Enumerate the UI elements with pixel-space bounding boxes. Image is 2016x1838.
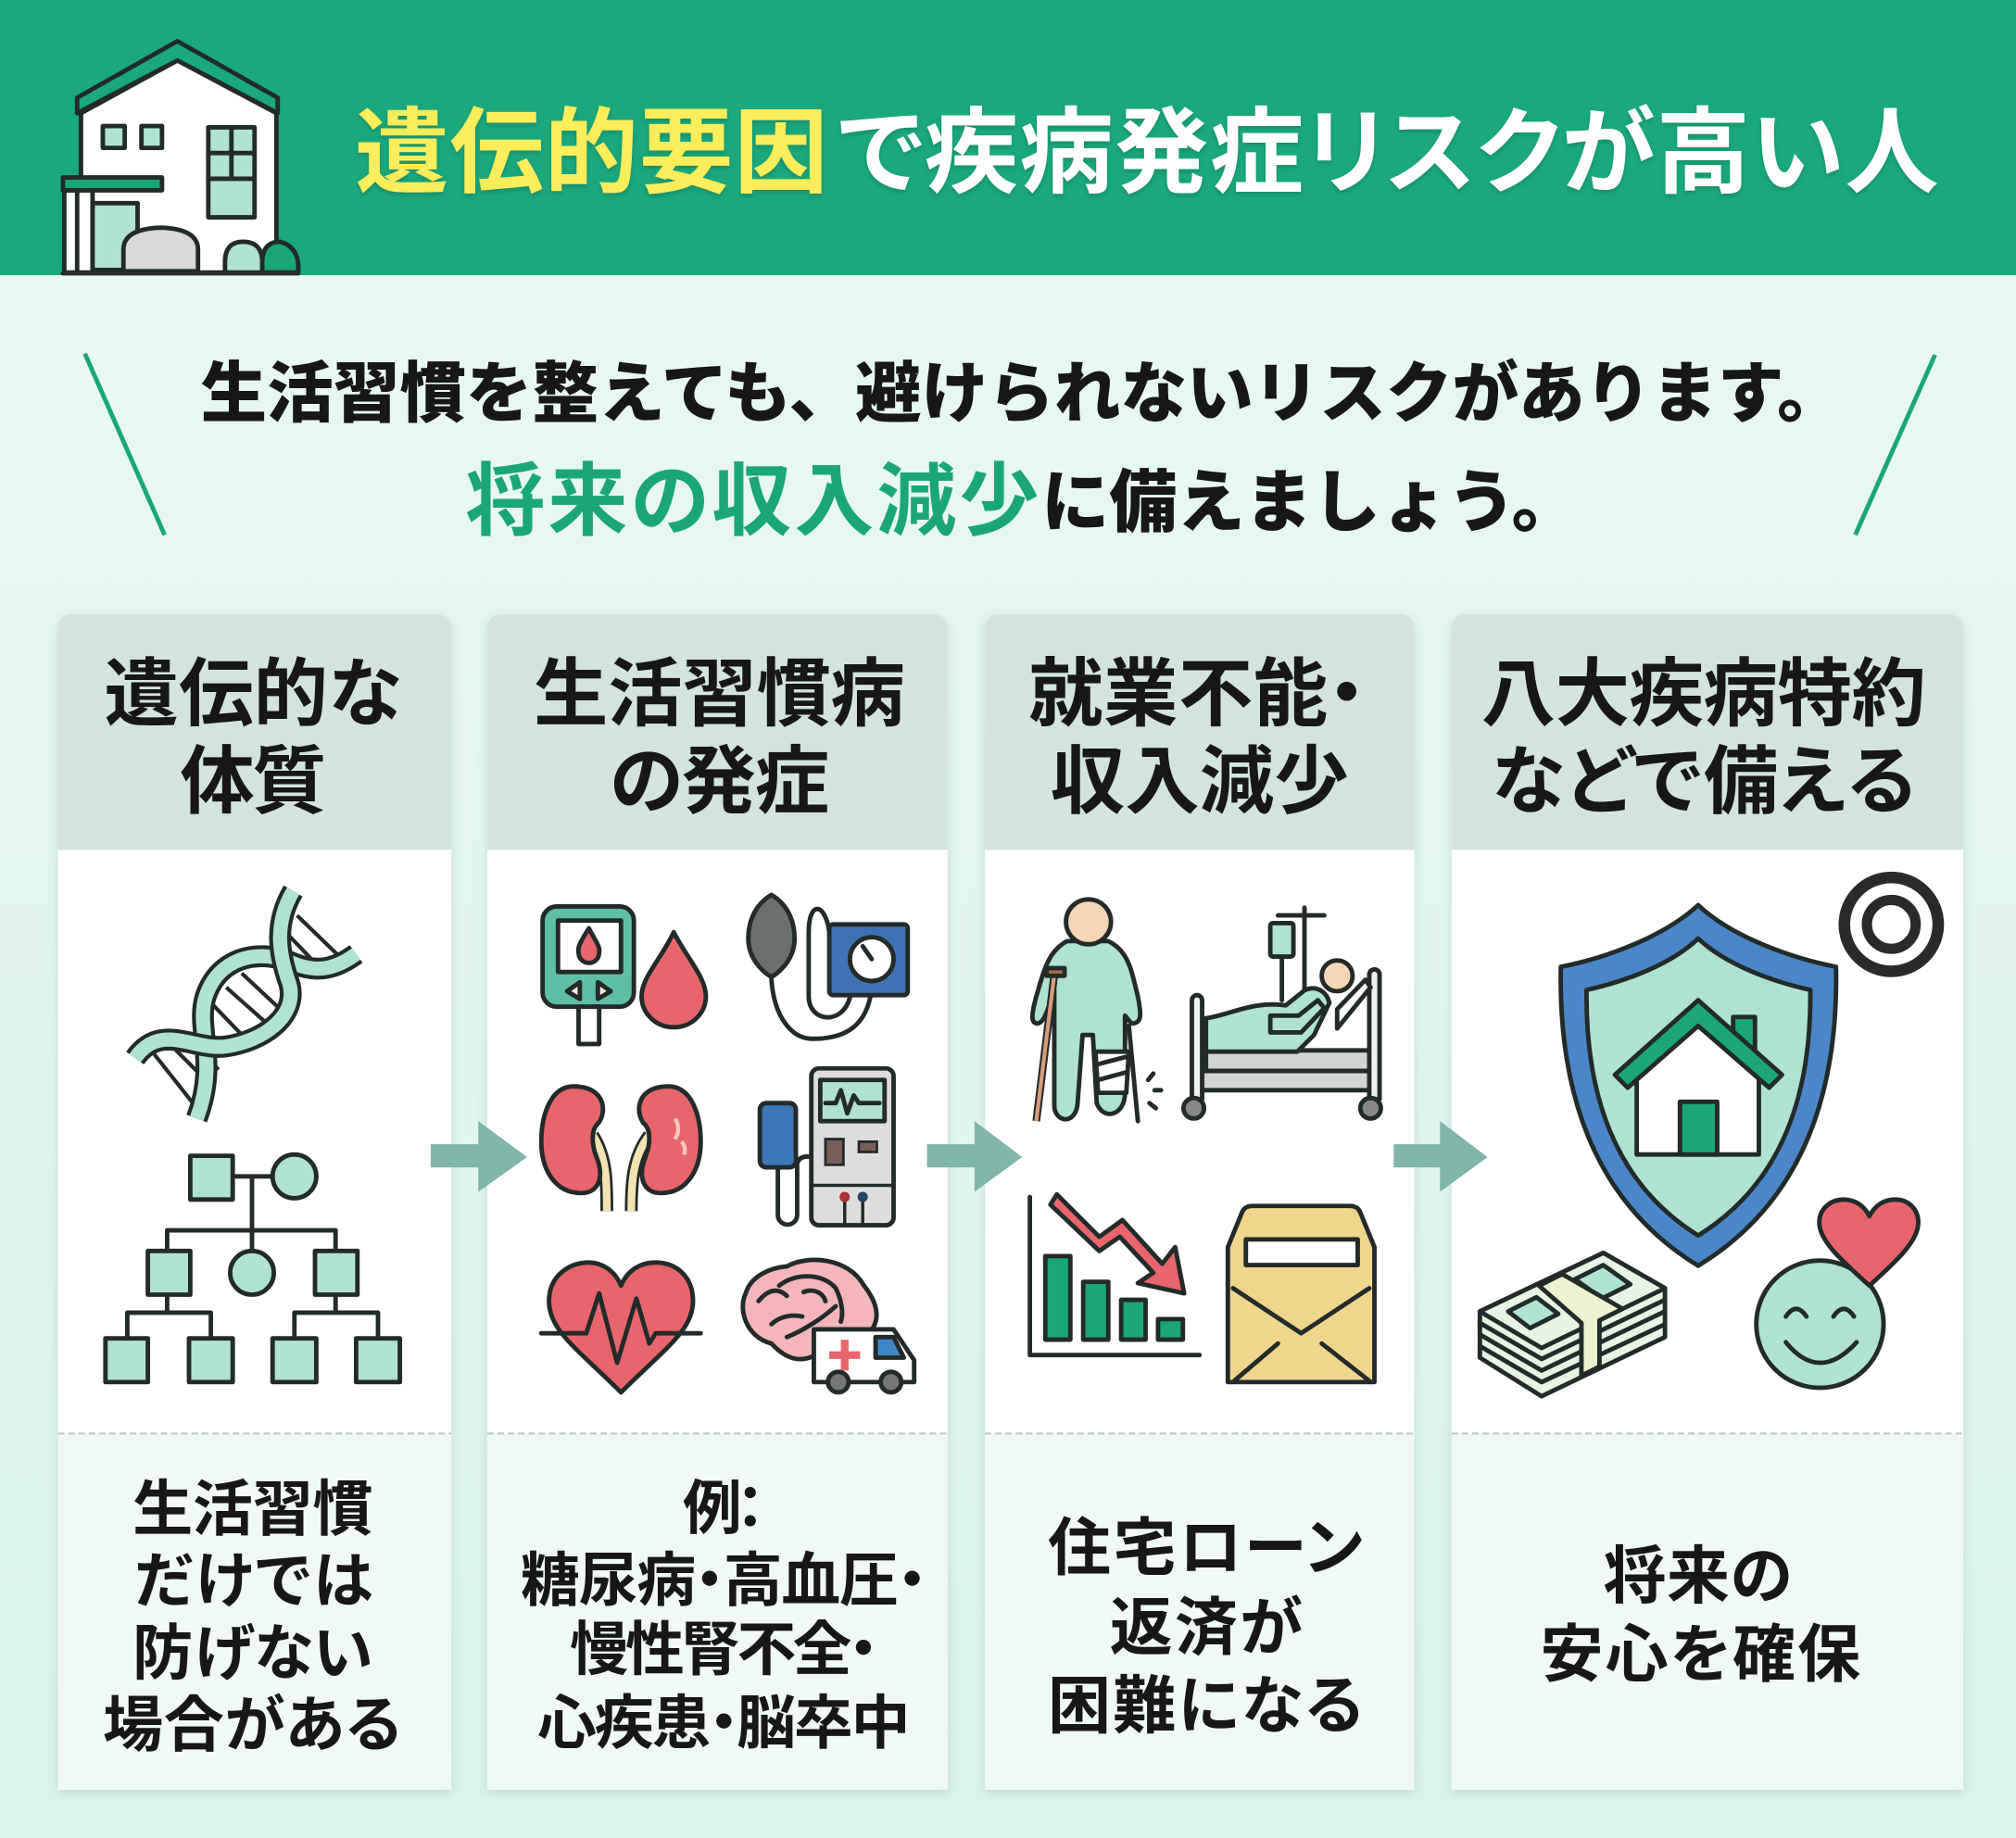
description [1541,1542,1860,1691]
icon: house [63,41,298,273]
description: 例： [683,1475,765,1542]
heading: 八大疾病特約 [1481,653,1926,736]
decorative slash right [1856,355,1935,535]
description [103,1475,401,1759]
icon: brain and ambulance [743,1260,914,1392]
heading: 就業不能・ [1028,653,1366,736]
description: 糖尿病・高血圧・ [521,1547,927,1614]
subtitle line 1: 生活習慣を整えても、避けられないリスクがあります。 [200,358,1844,432]
description: 防げない [132,1619,372,1687]
subtitle remainder: に備えましょう。 [1041,466,1580,541]
description: だけでは [133,1547,372,1615]
icon: heart [1820,1200,1919,1286]
arrow 3 [1393,1121,1488,1191]
subtitle line 2 [465,457,1580,546]
heading: 生活習慣病 [534,653,905,736]
description: 生活習慣 [132,1475,372,1542]
icon: kidneys [541,1087,700,1211]
icon: envelope [1228,1206,1375,1382]
icon: double circle [1845,877,1938,971]
description: 心疾患・脳卒中 [537,1690,911,1756]
description [1048,1513,1363,1742]
icon: falling bar chart [1030,1194,1200,1355]
icon: stack of money [1480,1253,1665,1396]
description: 安心を確保 [1541,1620,1860,1691]
title highlight: genetic factors: 遺伝的要因 [355,101,828,206]
heading [1028,653,1366,825]
heading: の発症 [610,741,829,825]
icon: patient in hospital bed [1183,908,1380,1118]
icon: glucose meter and drop [543,906,706,1044]
title remainder: で疾病発症リスクが高い人 [838,101,1939,206]
arrow 1 [431,1121,527,1191]
heading [1481,653,1926,825]
heading: 遺伝的な [104,653,401,736]
arrow 2 [927,1121,1022,1191]
title [355,101,1939,206]
heading: 体質 [180,741,326,825]
icon: family tree [106,1154,400,1382]
panel: lifestyle disease onset [487,614,948,1790]
heading: 収入減少 [1051,741,1349,825]
icon: dialysis machine [760,1068,893,1226]
icon: heart with ECG [541,1263,700,1392]
heading [534,653,905,825]
panel: genetic constitution [57,614,451,1790]
icon: smiling face [1757,1261,1884,1388]
description: 返済が [1110,1593,1303,1664]
subtitle highlight: 将来の収入減少 [465,457,1039,546]
description: 住宅ローン [1048,1513,1363,1583]
header band [0,0,2016,275]
decorative slash left [85,354,165,535]
description [521,1475,927,1756]
description: 困難になる [1048,1671,1363,1742]
description: 将来の [1604,1542,1793,1612]
icon: DNA [135,891,356,1118]
icon: shield with house [1561,905,1836,1265]
heading: などで備える [1492,741,1916,825]
description: 慢性腎不全・ [570,1617,878,1683]
heading [104,653,401,825]
icon: blood pressure monitor [749,895,908,1039]
panel: unable to work [985,614,1415,1790]
panel: prepare with rider [1452,614,1963,1790]
description: 場合がある [103,1692,401,1759]
icon: injured person on crutches [1032,900,1161,1121]
